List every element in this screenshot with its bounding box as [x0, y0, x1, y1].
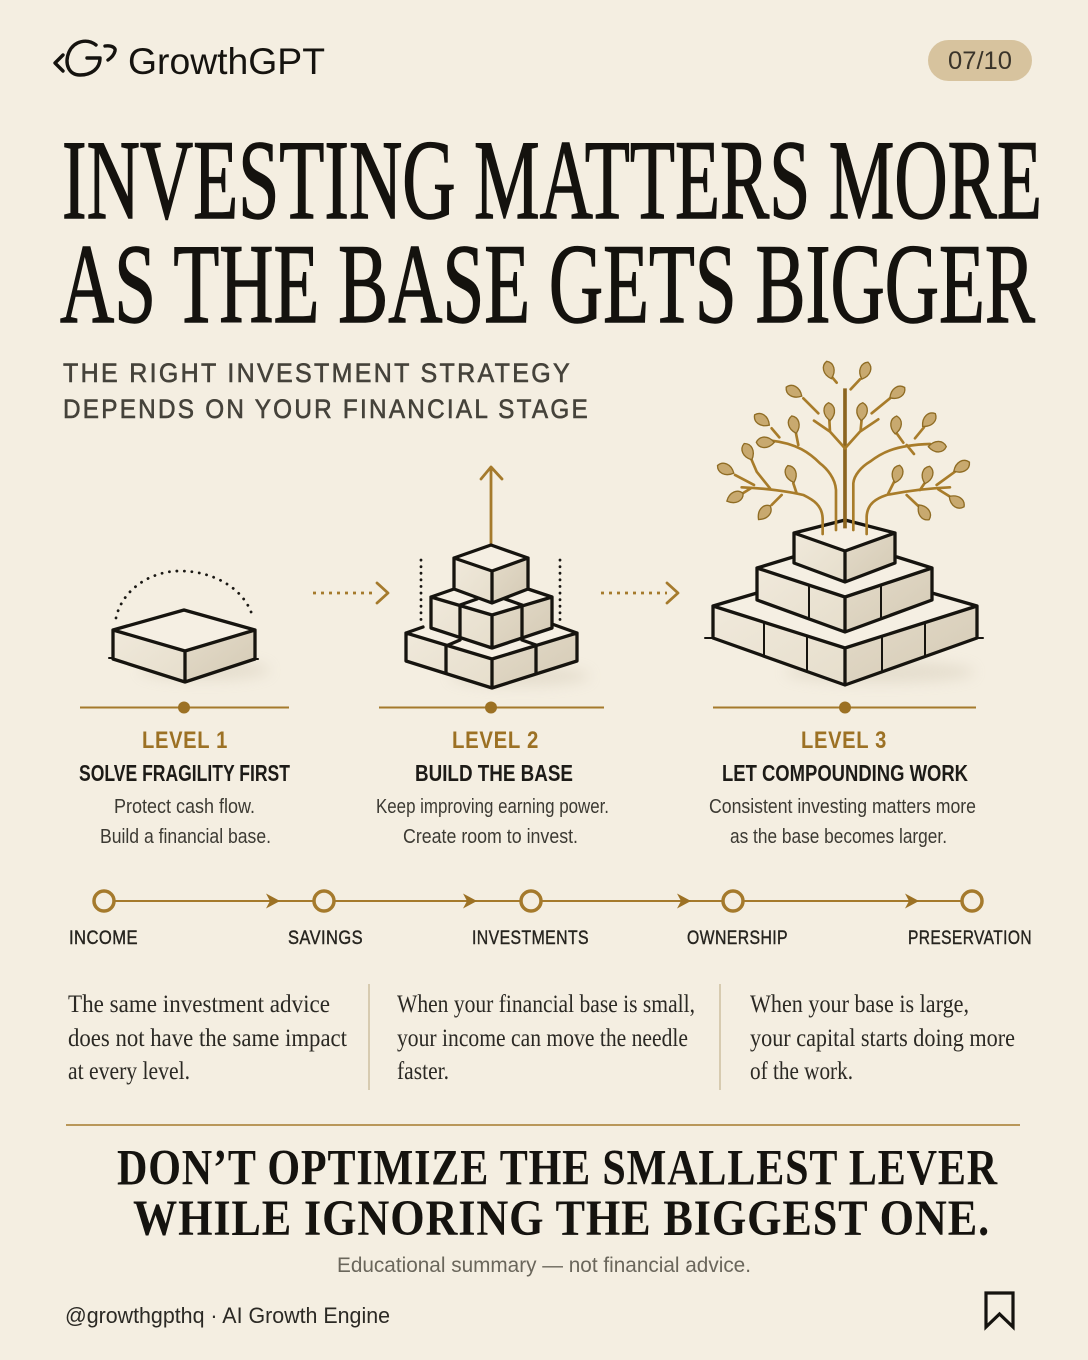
level 1 text block: [79, 702, 290, 848]
middle tier: [431, 589, 552, 615]
logo icon: [55, 41, 115, 75]
wealth stage timeline: INVESTMENTS: [472, 927, 589, 949]
bottom tier: [713, 593, 977, 648]
explanation column 3: When your base is large,: [750, 991, 969, 1018]
dotted arc: [116, 571, 253, 618]
explanation column 2: When your financial base is small,: [397, 991, 695, 1018]
bottom tier: [406, 624, 577, 659]
level 1 marker: [80, 702, 289, 714]
explanation column 3: your capital starts doing more: [750, 1025, 1015, 1052]
level 2 text block: [376, 702, 609, 848]
level 3 text block: LEVEL 3: [801, 727, 887, 754]
subtitle: THE RIGHT INVESTMENT STRATEGY: [63, 358, 572, 388]
level 2 text block: LEVEL 2: [452, 727, 539, 754]
explanation column 3: [750, 991, 1015, 1085]
level 2 text block: BUILD THE BASE: [415, 760, 573, 786]
level 3 text block: as the base becomes larger.: [730, 826, 947, 848]
level 2 text block: Create room to invest.: [403, 826, 578, 848]
level 1 text block: Build a financial base.: [100, 826, 271, 848]
illustration: level 3 pyramid: [705, 360, 983, 685]
level 2 text block: Keep improving earning power.: [376, 796, 609, 818]
subtitle: [63, 358, 590, 424]
subtitle: DEPENDS ON YOUR FINANCIAL STAGE: [63, 394, 590, 424]
footer handle: @growthgpthq · AI Growth Engine: [65, 1303, 390, 1328]
middle tier: [757, 557, 932, 597]
wealth stage timeline: OWNERSHIP: [687, 927, 788, 949]
wealth stage timeline: PRESERVATION: [908, 927, 1032, 949]
upward arrow: [481, 467, 502, 545]
page badge: 07/10: [948, 47, 1012, 75]
top cube: [454, 545, 528, 571]
title: [60, 118, 1042, 347]
level 3 text block: LET COMPOUNDING WORK: [722, 760, 968, 786]
disclaimer: Educational summary — not financial advice.: [337, 1254, 751, 1277]
level 3 text block: Consistent investing matters more: [709, 796, 976, 818]
level 1 text block: Protect cash flow.: [114, 796, 255, 818]
tree: [715, 360, 972, 534]
level 2 marker: [379, 702, 604, 714]
explanation column 2: [397, 991, 695, 1085]
page badge: [928, 40, 1032, 81]
logo wordmark: GrowthGPT: [128, 41, 325, 82]
level 1 text block: SOLVE FRAGILITY FIRST: [79, 760, 290, 786]
arrow: level 2 to level 3: [601, 583, 678, 603]
explanation column 2: your income can move the needle: [397, 1025, 688, 1052]
level 1 text block: LEVEL 1: [142, 727, 228, 754]
explanation column 1: at every level.: [68, 1058, 190, 1085]
wealth stage timeline: INCOME: [69, 927, 138, 949]
illustration: level 1 block: [109, 571, 270, 682]
level 3 text block: [709, 702, 976, 848]
top tier: [794, 520, 895, 551]
wealth stage timeline: SAVINGS: [288, 927, 363, 949]
guide dots: [421, 560, 560, 623]
explanation column 1: does not have the same impact: [68, 1025, 347, 1052]
illustration: level 2 stacked blocks: [406, 467, 590, 688]
icon: bookmark: [986, 1293, 1013, 1327]
logo: [55, 41, 325, 82]
arrow: level 1 to level 2: [313, 583, 388, 603]
explanation column 3: of the work.: [750, 1058, 853, 1085]
wealth stage timeline: [69, 891, 1032, 949]
closing statement: [117, 1140, 998, 1247]
explanation column 1: The same investment advice: [68, 991, 330, 1018]
explanation column 2: faster.: [397, 1058, 449, 1085]
level 3 marker: [713, 702, 976, 714]
explanation column 1: [68, 991, 347, 1085]
